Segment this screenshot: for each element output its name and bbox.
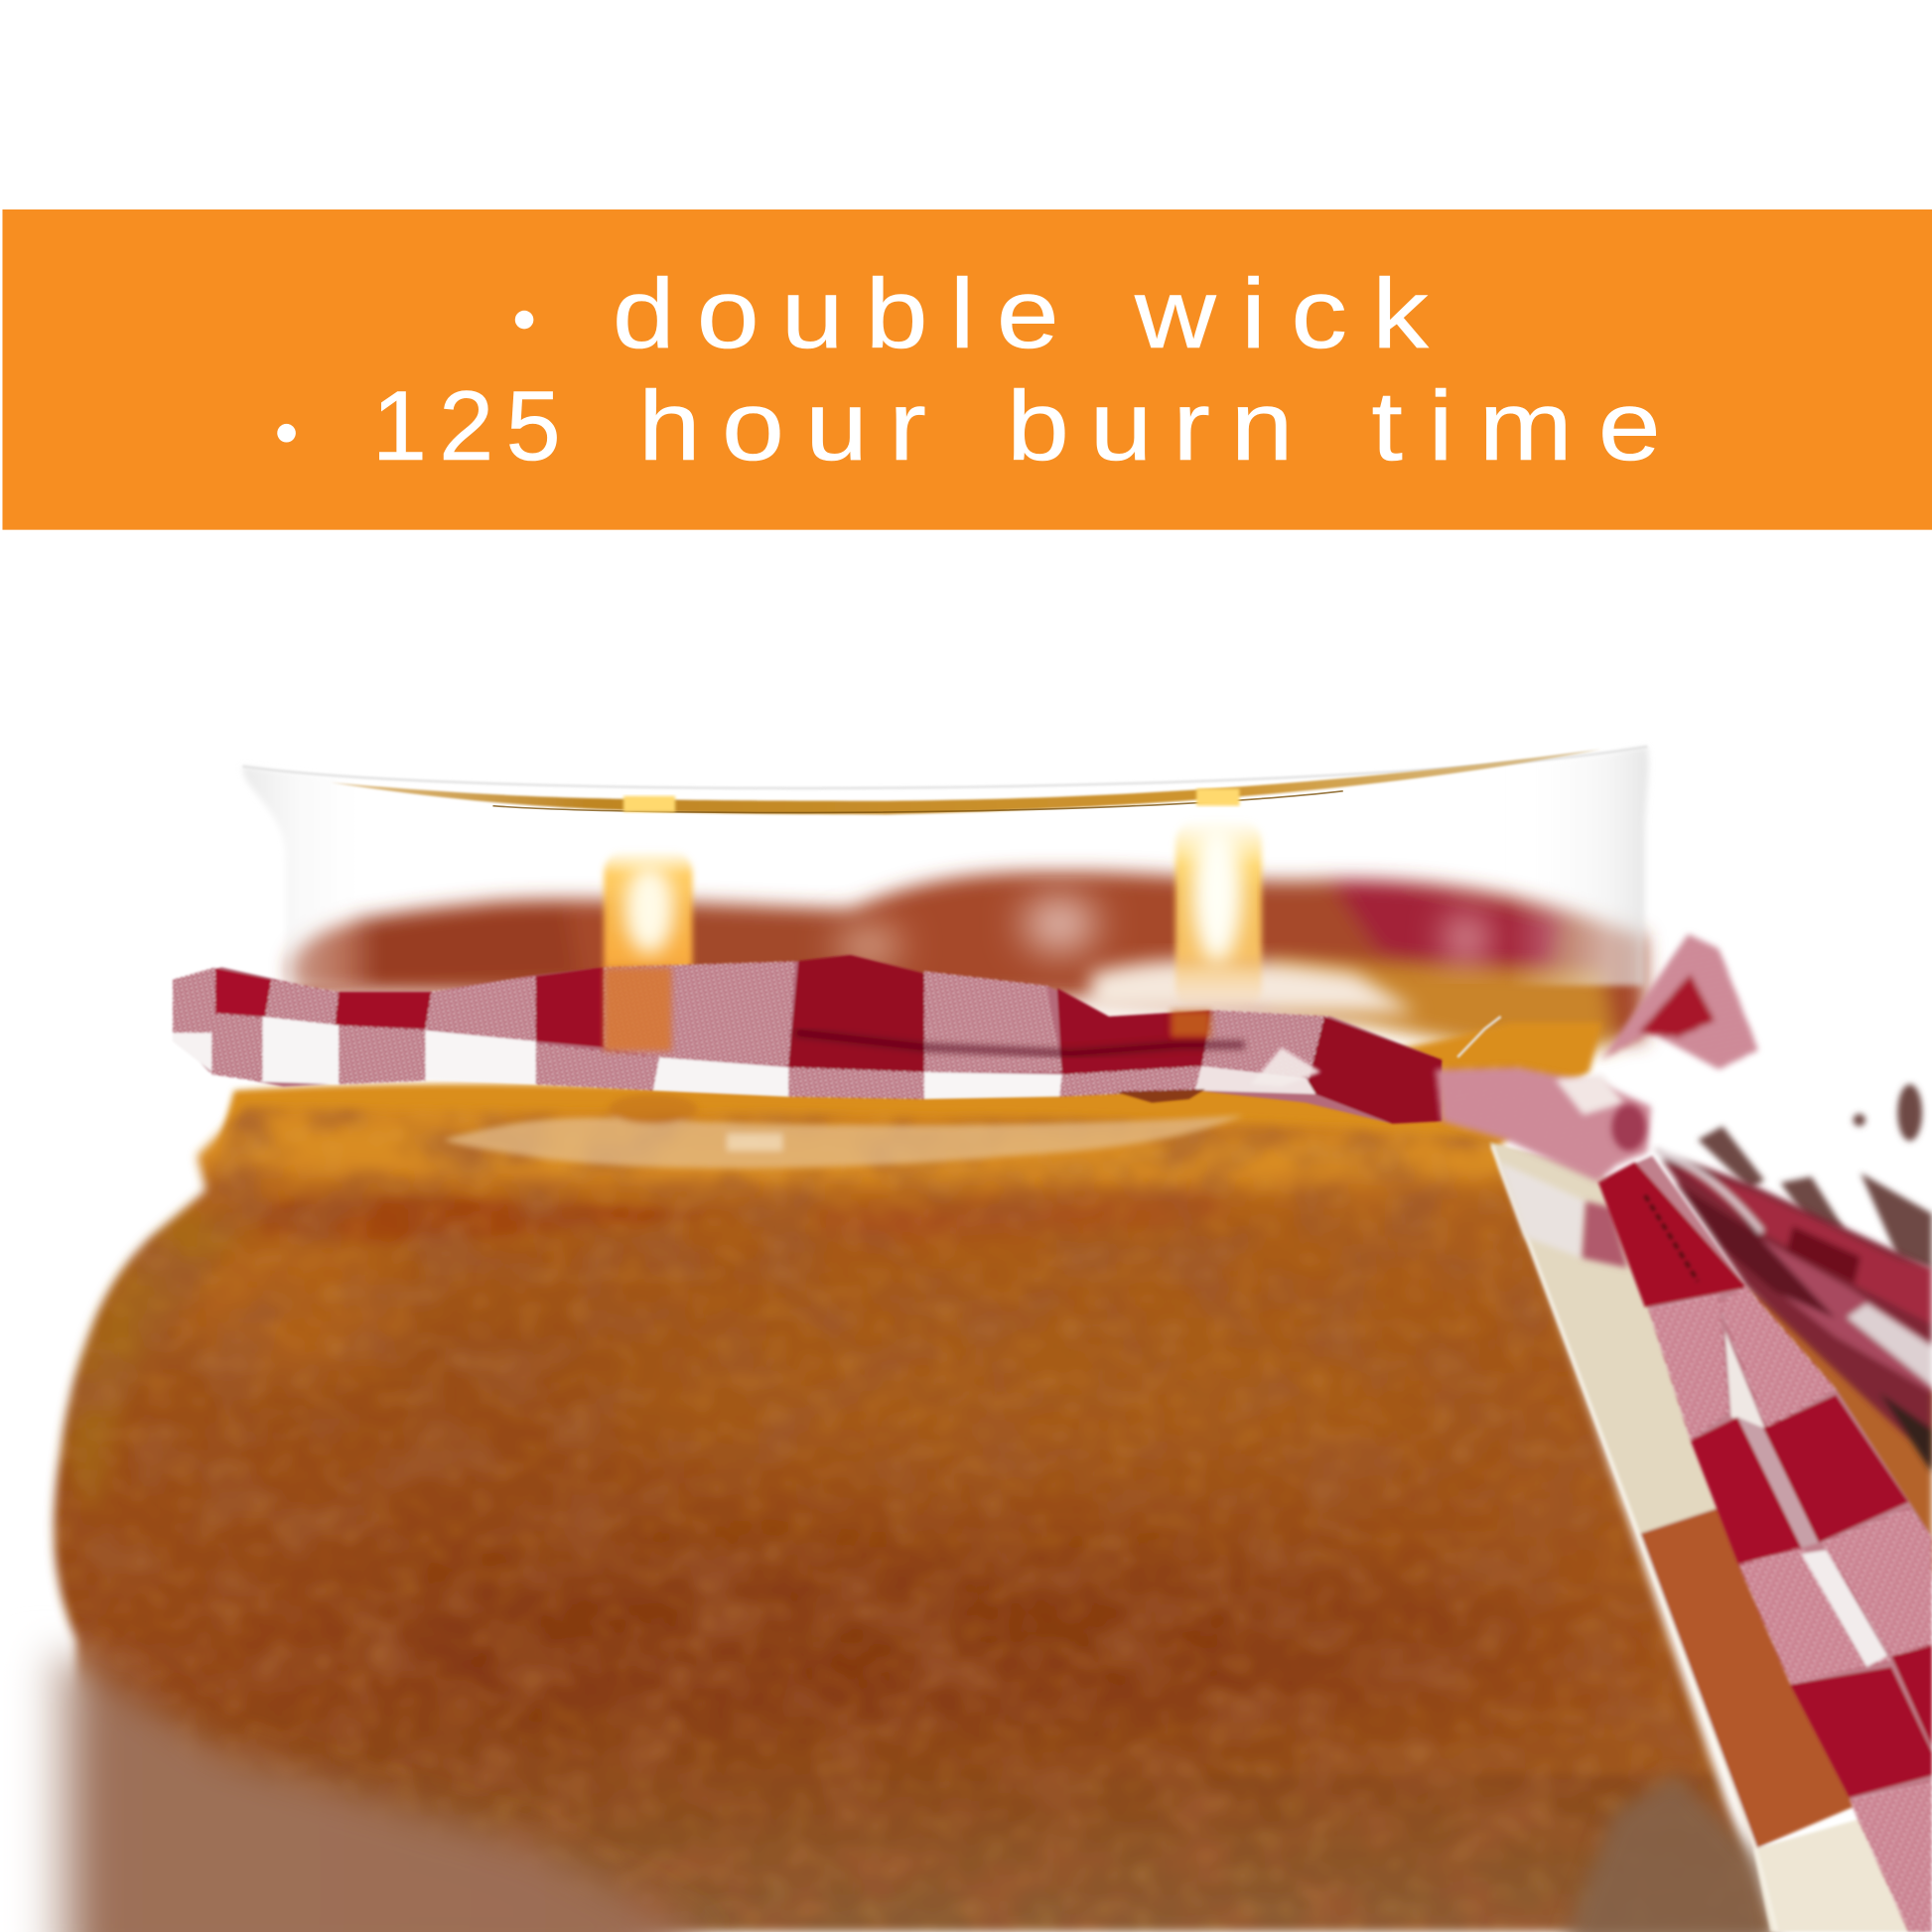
dark background specks	[1698, 1084, 1932, 1269]
jar base right shadow	[1553, 1774, 1780, 1932]
text line: double wick: wick	[1134, 258, 1430, 368]
bow loop right	[1601, 934, 1758, 1069]
text line: 125 hour burn time: hour	[638, 370, 926, 481]
text line: 125 hour burn time: time	[1371, 370, 1661, 481]
pale reflection spots	[837, 897, 1483, 964]
banner	[2, 209, 1932, 530]
label bottom cream section	[1753, 1819, 1922, 1932]
flame left	[604, 796, 692, 1059]
pale jar base fading into background	[25, 1651, 696, 1932]
text line: 125 hour burn time: burn	[1007, 370, 1294, 481]
white cloth corner	[1499, 1162, 1586, 1258]
ribbon base shape	[173, 955, 1442, 1124]
paper label strip	[1489, 1142, 1922, 1932]
frayed white threads	[1251, 1047, 1320, 1087]
pale glow behind ribbon	[1090, 959, 1417, 1013]
orange surface behind ribbon tails	[1746, 1287, 1932, 1578]
bullet one	[515, 311, 533, 329]
label cream section	[1489, 1142, 1725, 1534]
ribbon knot	[1436, 1067, 1651, 1181]
wax jar body	[46, 1104, 1772, 1932]
banner background	[2, 209, 1932, 530]
wax top surface	[209, 1023, 1601, 1176]
pink cloth patch	[1583, 1201, 1627, 1268]
knot curl	[1611, 1104, 1646, 1151]
candle jar photo	[0, 747, 1932, 1932]
text line: 125 hour burn time: 125	[372, 371, 561, 482]
bullet two	[277, 424, 296, 443]
ribbon dark fold shadow	[794, 1033, 1244, 1053]
back ribbon tails	[1655, 1149, 1932, 1472]
front ribbon tail with checks	[1598, 1156, 1932, 1932]
glass jar: rim and walls	[242, 747, 1649, 986]
ribbon upper row of checks	[173, 955, 1442, 1124]
blurred ribbon reflection through glass	[290, 872, 1645, 1047]
gingham ribbon around jar neck	[173, 955, 1651, 1181]
melted wax pool	[444, 1094, 1244, 1169]
flame right	[1175, 788, 1262, 1011]
text line: double wick: double	[613, 258, 1059, 368]
label edge highlight	[1492, 1146, 1777, 1932]
ribbon lower row of checks	[173, 1013, 1315, 1099]
flame glow over ribbon left	[604, 967, 671, 1051]
red check top	[1598, 1162, 1747, 1308]
frayed thread	[1457, 1017, 1501, 1057]
stitch shadow	[1645, 1195, 1698, 1282]
frayed threads under ribbon	[1115, 1089, 1205, 1103]
tail base	[1600, 1156, 1932, 1932]
knot highlights	[1555, 1074, 1624, 1115]
label orange section	[1639, 1506, 1861, 1850]
flame glow over ribbon right	[1171, 1011, 1211, 1037]
text line: 125 hour burn time	[372, 370, 1661, 482]
text line: double wick	[613, 258, 1430, 368]
